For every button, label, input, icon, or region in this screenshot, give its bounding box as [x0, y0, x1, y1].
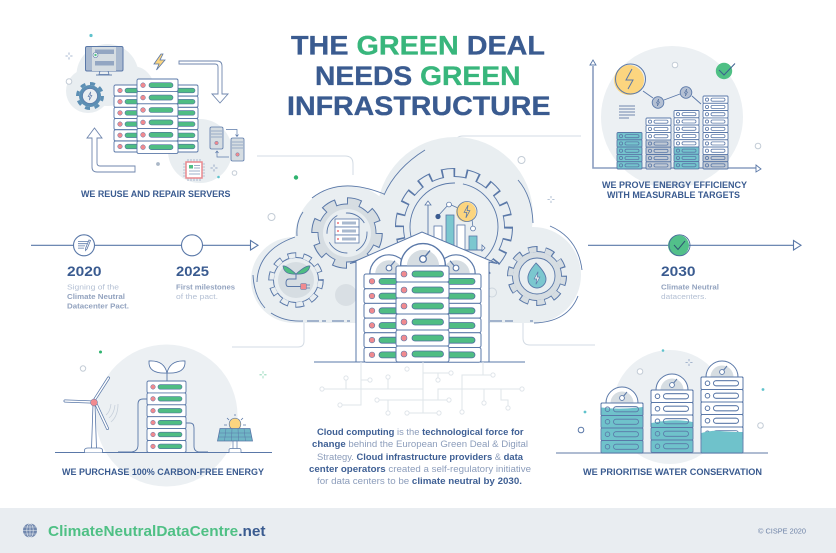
title: NEEDS GREEN: [315, 61, 520, 91]
text: 2025: First milestones: [176, 282, 235, 292]
panel: energy efficiency: [590, 46, 761, 188]
text: 2030: datacenters.: [661, 292, 706, 301]
ground line: [55, 452, 272, 454]
text: 2020: [67, 264, 129, 310]
tower B: [646, 118, 671, 169]
icon: small bolt circles: [652, 87, 692, 108]
server: central front rack: [396, 266, 449, 362]
text: 2020: Climate Neutral: [67, 292, 125, 301]
background blobs: [66, 44, 232, 183]
label: carbon-free energy: WE PURCHASE 100% CARBON-FREE ENERGY: [62, 467, 265, 477]
icon: bolt: [154, 54, 165, 70]
label: energy efficiency: WITH MEASURABLE TARGETS: [607, 190, 740, 200]
house: [350, 232, 497, 362]
copyright: © CISPE 2020: [758, 526, 806, 536]
arrow: timeline right: [794, 240, 801, 250]
icon: monitor: [86, 46, 123, 75]
label: energy efficiency: [602, 180, 748, 200]
arrow: top right: [179, 61, 228, 103]
milestone: 2025: [182, 235, 202, 256]
panel: carbon-free energy: [55, 344, 272, 486]
icon: chip: [183, 159, 205, 181]
water rack C: [701, 361, 743, 453]
tower A: [617, 132, 642, 169]
arrow: timeline left: [250, 240, 258, 250]
water rack A: [601, 387, 643, 453]
icon: large bolt circle: [614, 64, 646, 95]
text: 2025: 2025: [176, 264, 210, 279]
floor line: [314, 361, 525, 363]
circuit lines: [320, 362, 524, 415]
label: reuse and repair: WE REUSE AND REPAIR SERVERS: [81, 189, 230, 199]
icon: solar panel: [218, 414, 252, 452]
ground line: [556, 452, 768, 454]
gear: plant: [271, 255, 321, 305]
icon: green check: [716, 63, 735, 79]
decorative rings: [672, 62, 761, 149]
paragraph: change behind the European Green Deal & Digital: [312, 439, 528, 449]
gear: large chart: [400, 173, 508, 281]
chart axes: [590, 60, 761, 172]
paragraph: Strategy. Cloud infrastructure providers & data: [317, 452, 524, 462]
server: back racks: [114, 85, 198, 152]
water rack B: [651, 374, 693, 453]
title: [287, 30, 550, 121]
paragraph: Cloud computing is the technological force for: [317, 427, 524, 437]
paragraph: center operators created a self-regulatory initiative: [309, 464, 531, 474]
gauges: [370, 244, 475, 274]
panel: water conservation: [556, 349, 768, 464]
panel: central cloud datacenter: [251, 137, 582, 378]
footer bar: [0, 508, 836, 553]
icon: globe: [23, 524, 37, 538]
energy trend line: [643, 91, 701, 104]
leaves and plug: [283, 266, 310, 290]
panel: reuse and repair servers: [66, 34, 244, 183]
decorative marks: [260, 156, 554, 378]
text: 2030: Climate Neutral: [661, 282, 719, 292]
tower D: [703, 96, 728, 169]
text: 2020: Datacenter Pact.: [67, 302, 129, 310]
website link: ClimateNeutralDataCentre .net: [48, 523, 266, 540]
arrow: bottom left: [87, 128, 135, 172]
icon: wind turbine: [65, 378, 118, 452]
decorative marks: [66, 34, 237, 178]
cloud outline strokes: [253, 150, 582, 323]
icon: plant: [149, 361, 185, 381]
paragraph: for data centers to be climate neutral by 2030.: [317, 476, 522, 486]
text: 2030: [661, 264, 719, 301]
label: energy efficiency: WE PROVE ENERGY EFFICIENCY: [602, 180, 748, 190]
icon: repair gear: [78, 84, 102, 108]
timeline: left: [31, 235, 258, 256]
background circle: [601, 46, 743, 188]
milestone icon: 2030 check: [668, 235, 690, 256]
tower C: [674, 110, 699, 169]
decorative marks: [80, 350, 266, 378]
title: THE GREEN DEAL: [291, 30, 545, 60]
text: 2025: [176, 264, 235, 301]
connector lines: [232, 136, 595, 347]
text: 2030: 2030: [661, 264, 696, 279]
paragraph: [309, 427, 531, 486]
gear: water: [510, 249, 564, 303]
title: INFRASTRUCTURE: [287, 91, 550, 121]
icon: text lines: [619, 106, 635, 118]
text: 2020: Signing of the: [67, 282, 119, 292]
server list icon: [335, 219, 359, 243]
text: 2025: of the pact.: [176, 292, 218, 301]
text: 2020: 2020: [67, 264, 102, 279]
background circle: [613, 350, 727, 464]
icon: small towers: [210, 127, 244, 161]
timeline: right: [588, 235, 801, 256]
background circle: [96, 344, 238, 486]
server: cables: [118, 399, 208, 452]
water drop: [528, 263, 546, 288]
label: water conservation: WE PRIORITISE WATER CONSERVATION: [583, 467, 762, 477]
cloud: [251, 137, 581, 323]
decorative marks: [578, 349, 764, 433]
milestone icon: 2020 document: [74, 235, 94, 256]
gear: server icon: [315, 201, 379, 265]
chart: bars in gear: [425, 201, 485, 251]
server: central back racks: [364, 274, 481, 362]
server: front rack: [137, 79, 178, 153]
server: rack with plant: [147, 381, 186, 452]
